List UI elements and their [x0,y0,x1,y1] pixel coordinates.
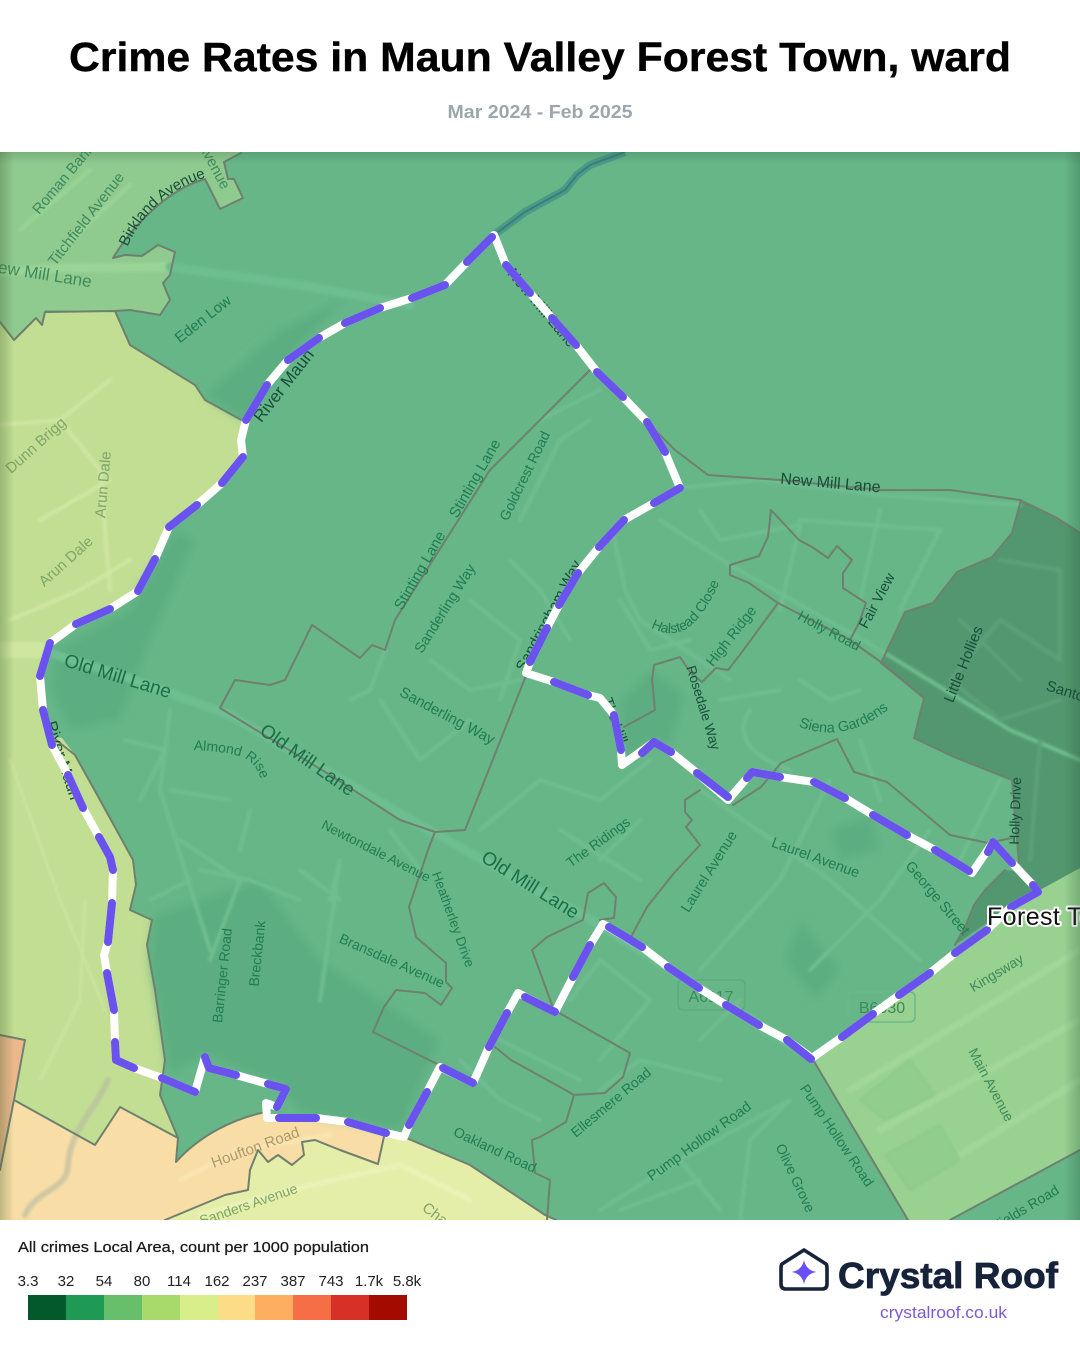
road shield: B6030 [868,992,916,1023]
street labels: New Mill Lane [780,471,881,496]
legend scale values: 80 [134,1273,150,1290]
street labels: Kingsway [967,950,1026,995]
street labels: Sanderling Way [412,561,480,656]
road shield: A6117 [678,980,745,1010]
legend scale values [18,1273,422,1290]
area: lime west [0,311,245,1145]
legend scale values: 237 [242,1273,268,1290]
street labels: Halstead Close [652,581,718,634]
street labels: Pump Hollow Road [797,1081,877,1189]
map edge vignette [0,152,1080,1220]
area boundary lines [0,153,1080,1220]
area: pale yellow south [165,1132,555,1220]
street labels: Stinting Lane [446,437,504,521]
street labels: A6117 [688,989,734,1006]
subtitle: date range: Mar 2024 - Feb 2025 [448,102,632,122]
street labels: River Maun [42,719,83,802]
ward boundary: purple dashes [40,237,1038,1133]
legend [18,1239,422,1320]
street labels: Little Hollies [941,624,987,705]
area: slightly darker parkland [50,295,880,1130]
street labels: Sanders Avenue [197,1180,300,1229]
street labels: Barringer Road [209,927,235,1024]
street labels: Heatherley Drive [429,870,477,969]
street labels: Birkland Avenue [118,170,204,246]
ward boundary: white line [40,235,1038,1137]
street labels: Laurel Avenue [769,835,862,882]
river centre line [494,152,625,235]
street labels: The Ridings [563,814,633,870]
street labels: Old Mill Lane [477,847,582,924]
street labels: Goldcrest Road [496,429,553,523]
street labels: Dunn Brigg [2,414,70,477]
street labels: Holly Drive [1006,777,1024,845]
street labels: Fair View [856,570,899,631]
river Maun [494,152,625,235]
street labels: Olive Grove [773,1141,818,1215]
icon: house outline [781,1250,827,1289]
street labels: Arun Dale [92,451,115,519]
title: Crime Rates in Maun Valley Forest Town, ward [69,34,1011,80]
area: dark green east [881,500,1080,890]
street labels: Eden Low [172,292,235,347]
street labels: Main Avenue [965,1045,1018,1124]
icon: purple star [792,1260,816,1284]
road network [0,170,1080,1220]
street labels: Ellesmere Road [567,1064,654,1140]
brand url: crystalroof.co.uk [880,1304,1008,1322]
street labels: Oakland Road [451,1123,539,1176]
street labels: Breckbank [246,919,269,987]
brand logo [781,1250,1059,1322]
street labels: Stinting Lane [391,529,449,613]
street labels: Old Mill Lane [62,650,174,703]
street labels: Bransdale Avenue [337,930,447,991]
street labels: Arun Dale [36,533,96,590]
area: orange block west [0,1035,25,1170]
area: light green south-east [812,868,1080,1220]
street labels: Pump Hollow Road [645,1099,755,1185]
legend scale values: 387 [280,1273,306,1290]
street labels: Rosedale Way [683,664,723,752]
legend scale values: 743 [318,1273,344,1290]
street labels: New Mill Lane [504,265,579,351]
street labels: Roman Bank [29,140,98,218]
street labels: B6030 [859,1000,905,1017]
area: peach south-west [0,1100,385,1220]
area: small dark patch near Forest Town [957,870,1032,944]
street labels: Houfton Road [209,1124,302,1172]
legend colour swatches [28,1295,407,1320]
legend scale values: 1.7k [355,1273,384,1290]
legend scale values: 5.8k [393,1273,422,1290]
street labels: George Street [902,858,972,938]
street labels: Sandringham Way [513,557,586,674]
street labels: Holly Road [795,607,863,654]
street labels: Almond Rise [194,740,267,778]
legend scale values: 114 [167,1273,191,1290]
legend scale values: 54 [96,1273,112,1290]
legend scale values: 3.3 [18,1273,38,1290]
street labels: The Hill [600,695,631,745]
street labels: Newtondale Avenue [319,817,433,885]
street labels: Titchfield Avenue [45,169,128,269]
legend scale values: 32 [58,1273,74,1290]
street labels: Chapel [419,1199,467,1242]
area: light green north-west [0,152,243,340]
legend scale values: 162 [204,1273,230,1290]
street labels: Fields Road [989,1182,1062,1234]
street labels: Siena Gardens [800,704,888,733]
brand name: Crystal Roof [838,1255,1059,1296]
street labels: Old Mill Lane [256,720,359,801]
map base: main green area [0,152,1080,1220]
legend title: All crimes Local Area, count per 1000 population [18,1239,369,1256]
street labels: River Maun [249,346,318,426]
street labels: Sanderling Way [397,684,498,748]
street labels: Laurel Avenue [678,828,741,915]
street labels: High Ridge [703,603,760,670]
street labels: Avenue [195,140,233,192]
